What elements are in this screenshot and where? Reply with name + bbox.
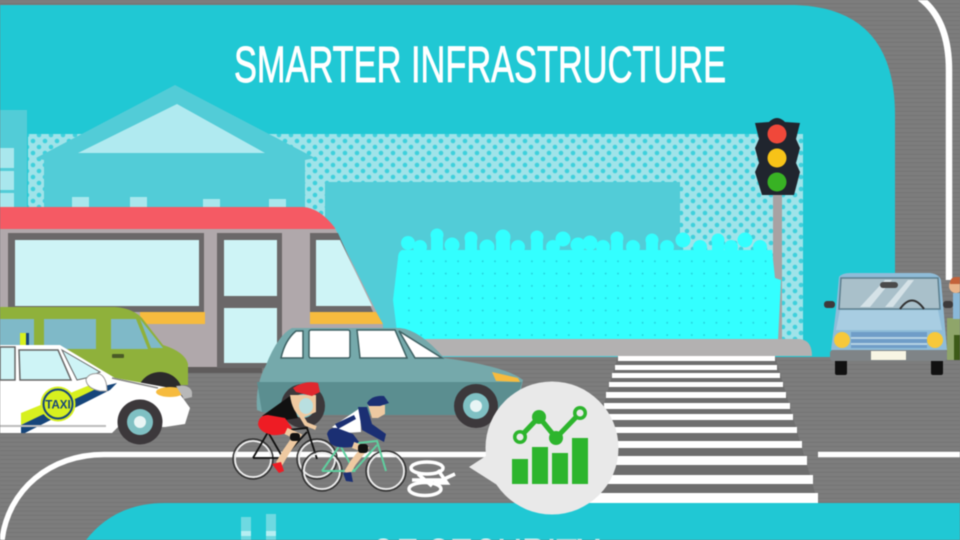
civic building <box>36 85 315 210</box>
left tower <box>0 110 27 210</box>
dotted city backdrop <box>28 134 803 356</box>
icon: bar and line chart <box>512 406 588 484</box>
speech bubble <box>469 382 618 514</box>
cyclist: blue rider <box>302 396 406 491</box>
bottom panel decorations <box>241 514 276 540</box>
green van <box>0 307 188 418</box>
cyclist: red rider <box>233 382 337 479</box>
blue car <box>824 273 953 375</box>
teal car <box>257 328 523 428</box>
curb <box>425 339 812 356</box>
taxi badge: TAXI <box>45 400 71 412</box>
bike lane symbol <box>409 462 455 496</box>
title: SMARTER INFRASTRUCTURE <box>234 36 726 93</box>
crosswalk <box>575 356 818 503</box>
panel: bottom cyan <box>86 503 960 540</box>
large building block <box>325 182 680 357</box>
taxi <box>0 333 192 444</box>
panel: top cyan <box>0 5 895 357</box>
tram <box>0 207 383 373</box>
traffic light <box>755 118 800 342</box>
person behind blue car <box>947 277 960 360</box>
taxi badge <box>40 386 76 422</box>
hedge <box>393 228 781 340</box>
